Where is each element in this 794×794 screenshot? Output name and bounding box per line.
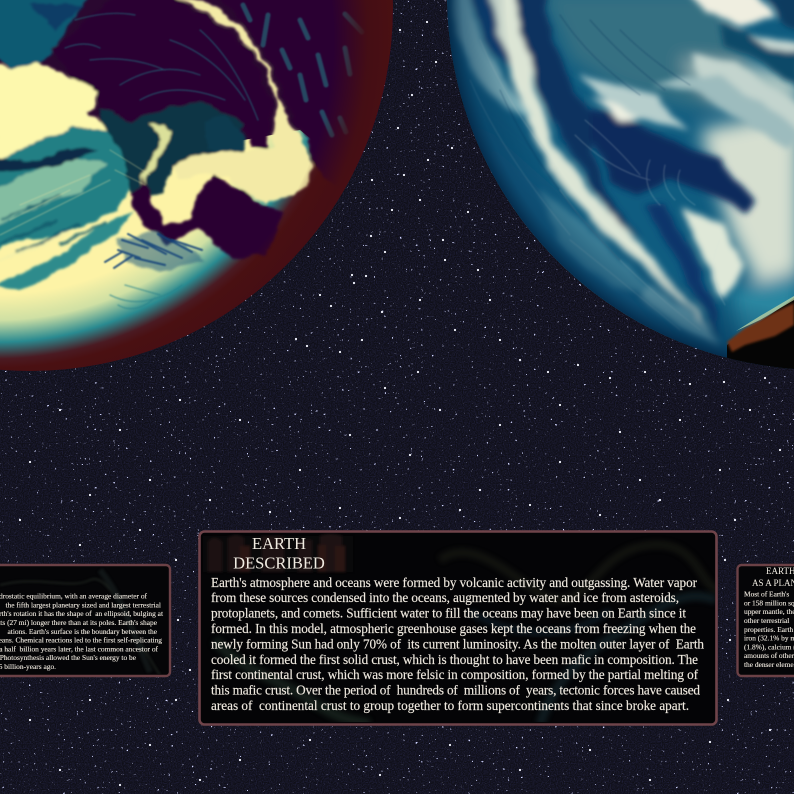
cream stripe and swirl [170, 0, 313, 203]
panel body text: ations. Earth's surface is the boundary between the [7, 627, 158, 636]
panel heading [752, 566, 794, 588]
bright streaks [488, 0, 722, 345]
panel body text: other terrestrial [744, 616, 789, 625]
planet rim glow [204, 0, 393, 327]
panel body text [744, 590, 794, 669]
planet hatch detail [0, 5, 362, 309]
panel body text: amounts of other [744, 651, 794, 660]
planet fine streaks [470, 15, 725, 330]
planet surface: lower cream hemisphere [0, 130, 354, 371]
panel body text: upper mantle, the [744, 607, 794, 616]
panel body text: the denser eleme [744, 660, 794, 669]
planet edge shading [447, 0, 764, 358]
panel body text: from these sources condensed into the oceans, augmented by water and ice from asteroids, [211, 590, 679, 605]
right info panel (cropped) [738, 565, 794, 676]
panel body text: or 158 million sq [744, 598, 794, 607]
panel body text: Photosynthesis allowed the Sun's energy to be [0, 653, 137, 662]
panel body text: areas of continental crust to group together to form supercontinents that since broke apart. [211, 698, 689, 713]
panel body text: properties. Earth [744, 625, 794, 634]
right planet [447, 0, 794, 400]
panel body text: drostatic equilibrium, with an average diameter of [0, 592, 148, 600]
panel body text [0, 592, 164, 671]
planet cloud bands [450, 0, 794, 345]
panel body text: this mafic crust. Over the period of hundreds of millions of years, tectonic forces have caused [211, 683, 700, 698]
panel body text [211, 575, 704, 713]
panel body text: protoplanets, and comets. Sufficient water to fill the oceans may have been on Earth since it [211, 606, 686, 621]
panel heading: DESCRIBED [233, 554, 325, 572]
panel body text: the fifth largest planetary sized and largest terrestrial [6, 600, 161, 609]
land fragment at bottom right [726, 296, 794, 369]
panel decoration [203, 534, 720, 725]
panel heading: EARTH [252, 534, 306, 553]
panel body text: newly forming Sun had only 70% of its current luminosity. As the molten outer layer of Earth [211, 636, 704, 651]
mid teal hatch zone [0, 127, 140, 250]
panel body text: Most of Earth's [744, 590, 789, 598]
panel body text: Earth's atmosphere and oceans were formed by volcanic activity and outgassing. Water vapor [211, 575, 698, 590]
panel heading [233, 534, 325, 572]
panel body text: cooled it formed the first solid crust, which is thought to have been mafic in composition. The [211, 652, 698, 667]
panel body text: first continental crust, which was more felsic in composition, formed by the partial melting of [211, 667, 699, 682]
dark band [510, 0, 640, 240]
panel body text: its (27 mi) longer there than at its poles. Earth's shape [0, 618, 158, 627]
upper right dark region [241, 22, 392, 180]
left info panel (cropped) [0, 565, 170, 676]
panel wisps [0, 570, 160, 675]
left planet [0, 0, 400, 400]
dark swirl lower [128, 172, 282, 258]
planet soft colour fields [470, 0, 794, 350]
panel body text: formed. In this model, atmospheric greenhouse gases kept the oceans from freezing when the [211, 621, 696, 636]
panel body text: a half billion years later, the last common ancestor of [0, 644, 159, 653]
main panel: Earth described [200, 532, 720, 725]
